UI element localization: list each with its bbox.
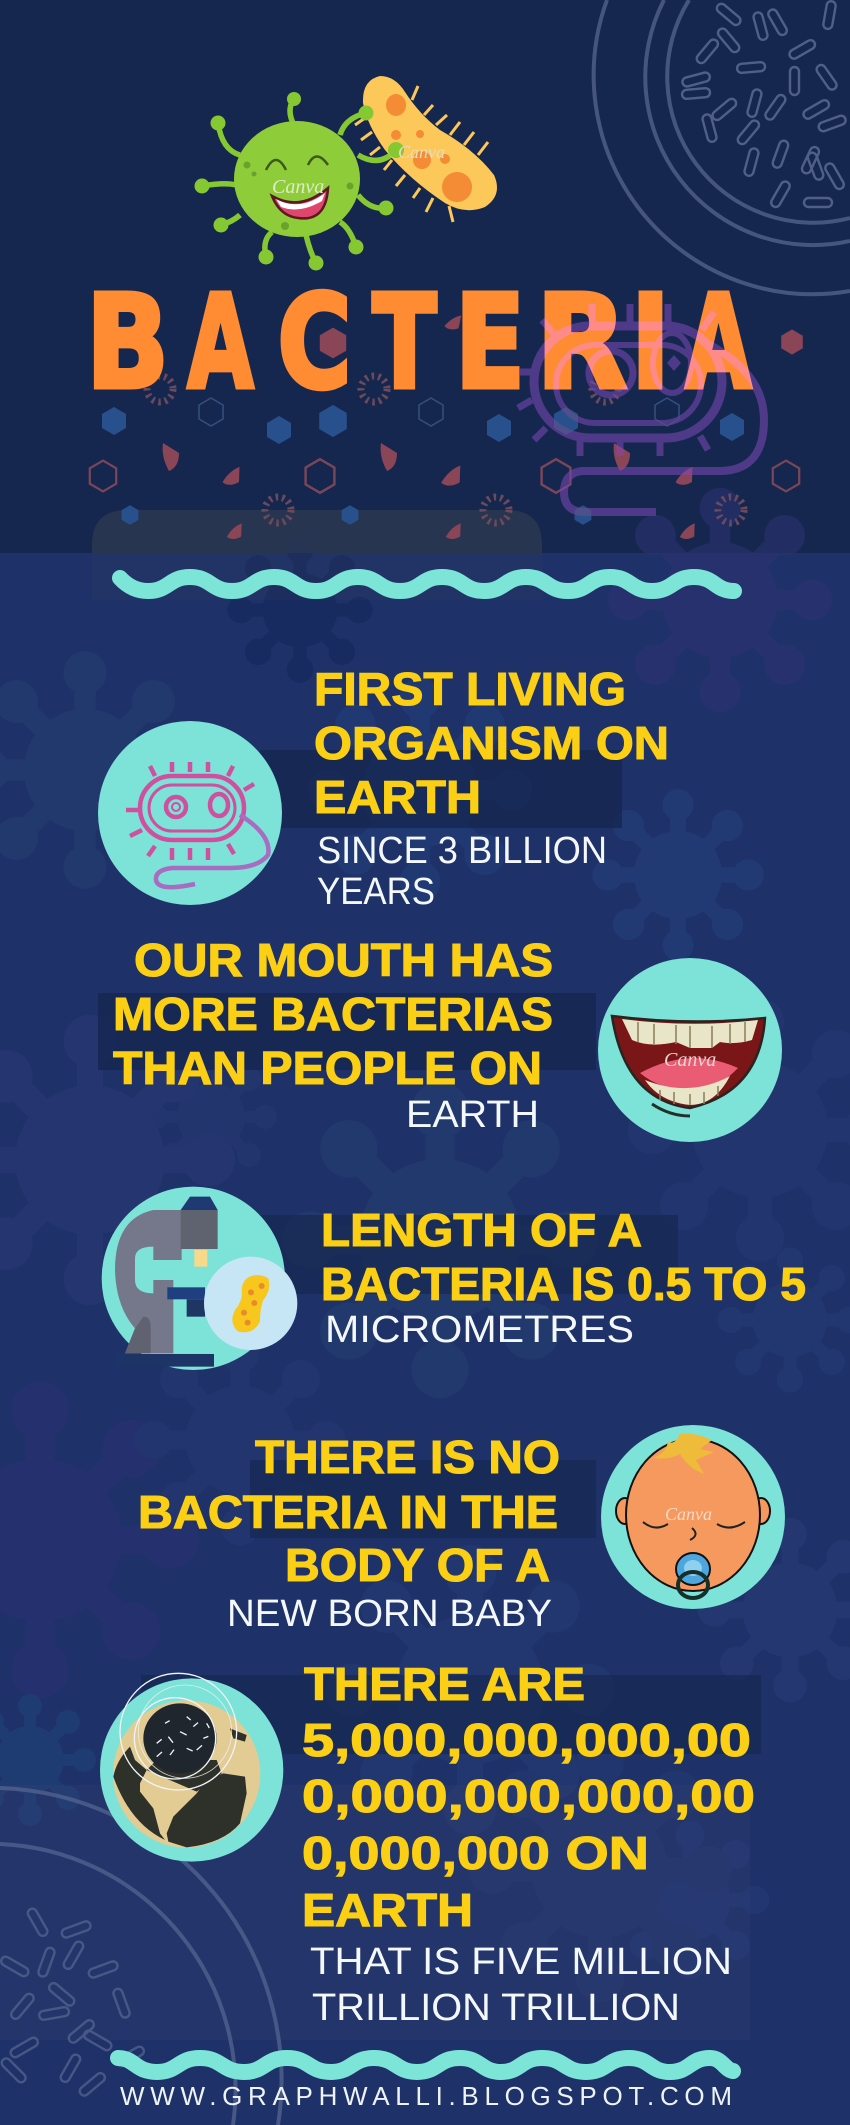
heading: FIRST LIVING bbox=[314, 663, 626, 715]
heading: EARTH bbox=[314, 771, 481, 823]
heading: BACTERIA IN THE bbox=[138, 1486, 558, 1538]
icon: laughing mouth: Canva bbox=[664, 1049, 716, 1071]
icon: yellow rod bacterium bbox=[355, 76, 497, 222]
icon: bacterium line art in circle bbox=[98, 721, 282, 905]
heading bbox=[302, 1658, 755, 1936]
subtext: SINCE 3 BILLION bbox=[317, 830, 607, 872]
heading: THAN PEOPLE ON bbox=[113, 1042, 542, 1094]
fact 5: bacteria count on earth bbox=[100, 1658, 755, 2029]
icon: sleeping baby face bbox=[601, 1425, 785, 1609]
icon: laughing mouth bbox=[598, 958, 782, 1142]
heading: BACTERIA IS 0.5 TO 5 bbox=[321, 1258, 806, 1310]
icon: green smiling germ: Canva bbox=[272, 176, 324, 198]
heading bbox=[314, 663, 669, 823]
top header background bbox=[0, 0, 850, 553]
translucent dark text backing bars bbox=[0, 510, 761, 2040]
petri dish top right bbox=[594, 0, 850, 294]
title: BACTERIA: R bbox=[536, 268, 627, 418]
icon: earth globe with petri dish bbox=[100, 1673, 283, 1862]
title: BACTERIA: E bbox=[455, 268, 525, 418]
subtext: MICROMETRES bbox=[325, 1309, 634, 1351]
heading: 5,000,000,000,00 bbox=[302, 1714, 751, 1766]
subtext: NEW BORN BABY bbox=[227, 1593, 552, 1635]
heading: EARTH bbox=[302, 1884, 473, 1936]
icon: microscope with bacterium bbox=[102, 1187, 297, 1370]
icon: green smiling germ bbox=[194, 92, 396, 270]
subtext: TRILLION TRILLION bbox=[312, 1987, 680, 2029]
decorative hexagon and pie pattern bbox=[90, 315, 803, 543]
lower content background bbox=[0, 553, 850, 2125]
fact 2: mouth bacteria bbox=[113, 934, 782, 1142]
subtext: THAT IS FIVE MILLION bbox=[310, 1941, 732, 1983]
footer url: WWW.GRAPHWALLI.BLOGSPOT.COM bbox=[120, 2081, 732, 2111]
top wave divider bbox=[120, 577, 734, 591]
fact 1: first living organism bbox=[98, 663, 669, 913]
heading: MORE BACTERIAS bbox=[113, 988, 553, 1040]
title: BACTERIA: I bbox=[631, 268, 670, 418]
fact 3: length of bacteria bbox=[102, 1187, 806, 1370]
heading bbox=[113, 934, 553, 1094]
bottom wave divider bbox=[118, 2058, 733, 2072]
subtext bbox=[310, 1941, 732, 2029]
title: BACTERIA: B bbox=[86, 268, 169, 418]
heading: THERE ARE bbox=[304, 1658, 585, 1710]
heading bbox=[138, 1431, 560, 1591]
subtext bbox=[317, 830, 607, 913]
heading: 0,000,000 ON bbox=[302, 1827, 649, 1879]
heading: 0,000,000,000,00 bbox=[302, 1770, 755, 1822]
title: BACTERIA: A bbox=[188, 268, 254, 418]
heading: BODY OF A bbox=[285, 1539, 550, 1591]
heading: THERE IS NO bbox=[255, 1431, 560, 1483]
background virus silhouettes bbox=[0, 488, 850, 2002]
icon: sleeping baby face: Canva bbox=[665, 1504, 712, 1524]
heading bbox=[321, 1204, 806, 1310]
title: BACTERIA bbox=[86, 268, 752, 418]
petri dish bottom left bbox=[0, 1788, 282, 2125]
title: BACTERIA: T bbox=[372, 268, 436, 418]
title: BACTERIA: A bbox=[686, 268, 752, 418]
title: BACTERIA: C bbox=[278, 268, 352, 418]
purple bacterium outline over title bbox=[518, 304, 764, 512]
icon: yellow rod bacterium: Canva bbox=[398, 142, 445, 162]
subtext: YEARS bbox=[317, 871, 435, 913]
fact 4: new born baby bbox=[138, 1425, 785, 1635]
heading: ORGANISM ON bbox=[314, 717, 669, 769]
heading: LENGTH OF A bbox=[321, 1204, 642, 1256]
heading: OUR MOUTH HAS bbox=[134, 934, 553, 986]
subtext: EARTH bbox=[406, 1094, 539, 1136]
